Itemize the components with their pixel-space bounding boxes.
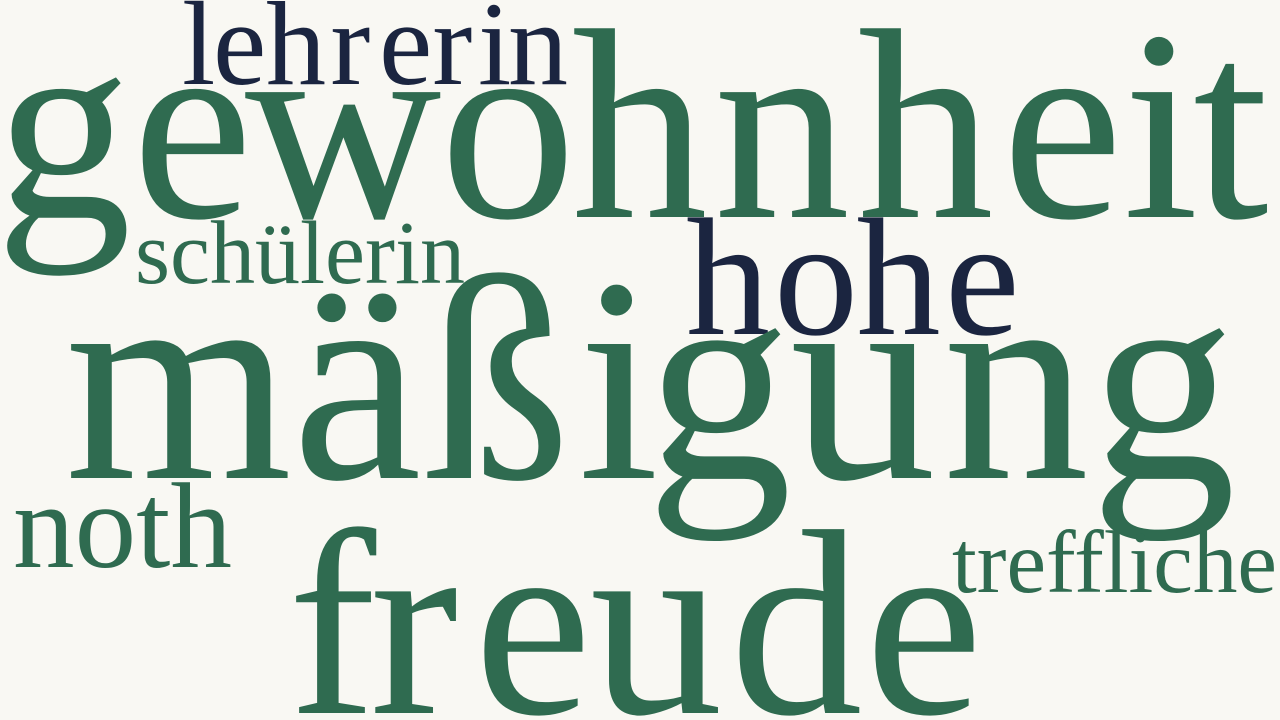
- word: hohe: hohe: [686, 185, 1020, 371]
- word: noth: noth: [13, 459, 232, 594]
- word: mäßigung: mäßigung: [65, 219, 1236, 542]
- word: schülerin: schülerin: [135, 204, 465, 303]
- word: treffliche: treffliche: [952, 514, 1277, 612]
